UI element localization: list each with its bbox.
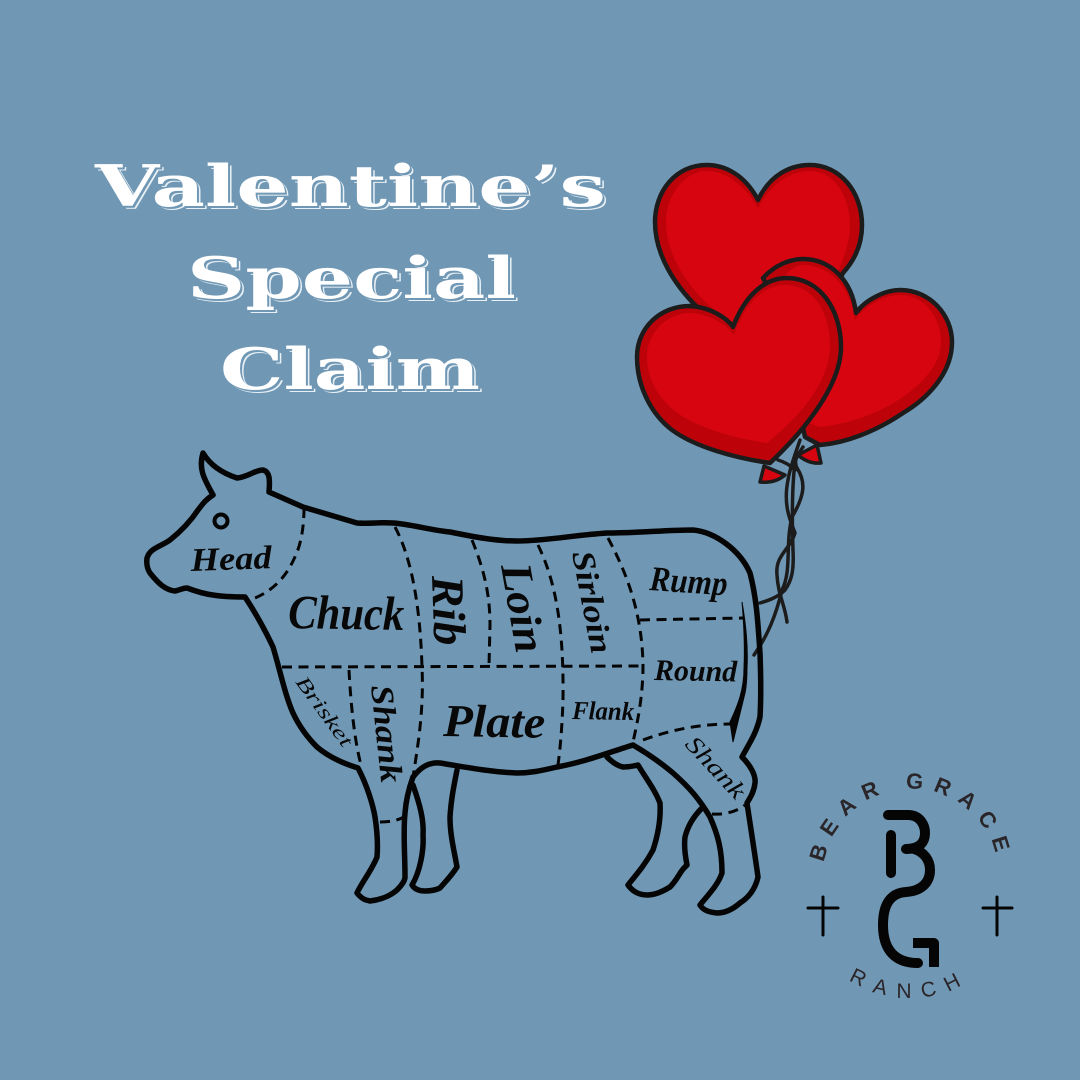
balloon knots xyxy=(760,445,821,482)
eye xyxy=(214,514,228,528)
label: chuck: Chuck xyxy=(288,586,405,641)
label: head: Head xyxy=(189,540,273,579)
logo arc text: top xyxy=(823,789,999,906)
title: Special xyxy=(187,245,516,312)
title xyxy=(94,153,606,403)
label: loin: Loin xyxy=(491,558,555,656)
label: flank: Flank xyxy=(571,696,634,726)
cow diagram xyxy=(147,453,761,913)
cut labels xyxy=(189,540,751,805)
balloon: top heart xyxy=(655,165,862,380)
balloon: front heart xyxy=(637,278,841,463)
logo: Bear Grace Ranch xyxy=(806,773,1014,998)
title: Claim xyxy=(220,336,480,403)
right cross xyxy=(983,897,1012,935)
title: Valentine’s xyxy=(94,153,606,220)
balloon strings xyxy=(754,440,803,655)
logo: Bear Grace Ranch: BEAR GRACE xyxy=(809,773,1010,861)
label: round: Round xyxy=(653,654,738,688)
label: rump: Rump xyxy=(648,559,729,603)
logo: Bear Grace Ranch: RANCH xyxy=(850,968,960,998)
logo arc text: bottom xyxy=(799,887,1021,998)
cut lines xyxy=(250,508,745,822)
label: front shank: Shank xyxy=(364,683,410,784)
tail line xyxy=(730,602,747,742)
near-front second leg xyxy=(412,770,457,891)
logo BG monogram xyxy=(883,815,934,967)
balloon: right heart xyxy=(763,259,952,445)
far back leg xyxy=(607,757,702,895)
label: rib: Rib xyxy=(422,574,475,646)
label: sirloin: Sirloin xyxy=(565,547,620,656)
left cross xyxy=(808,897,838,935)
cow body outline xyxy=(201,453,761,913)
cow head and chest outline xyxy=(147,495,413,901)
label: plate: Plate xyxy=(442,695,546,748)
label: rear shank: Shank xyxy=(680,731,751,805)
label: brisket: Brisket xyxy=(291,672,357,752)
